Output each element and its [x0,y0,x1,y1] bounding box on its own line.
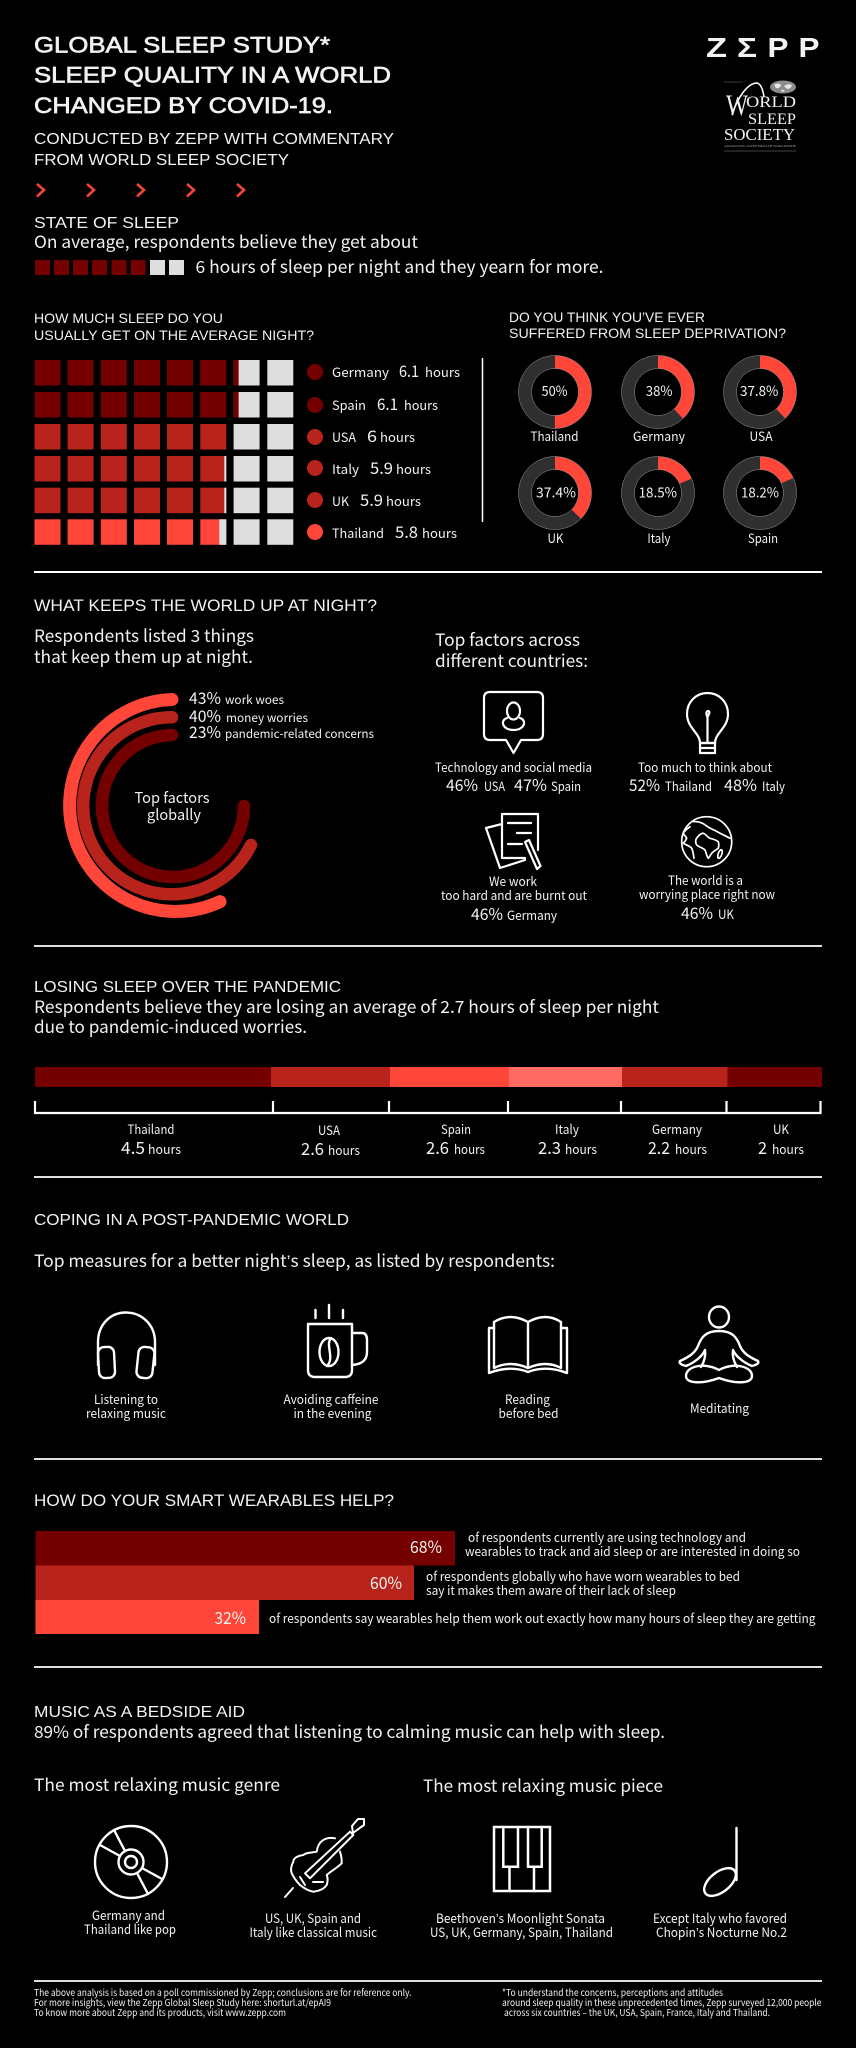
chart: wearables bars [36,1531,455,1634]
text: state of sleep intro: On average, respondents believe they get about [34,228,419,253]
heading: losing sleep: LOSING SLEEP OVER THE PANDEMIC [34,979,341,996]
text: genre and piece captions: US, UK, Spain and [265,1908,361,1927]
chart: sleep deprivation donuts [518,356,796,547]
donut: Italy 18.5% [622,456,694,547]
legend: hours by country: Thailand [332,523,384,542]
text: wearables descriptions: say it makes them aware of their lack of sleep [426,1580,676,1599]
legend: hours by country: hours [404,395,438,414]
logo: Zepp: Z [706,32,727,63]
legend: hours by country: Spain [332,395,366,414]
legend: hours by country: Italy [332,459,359,478]
legend: global factors [189,685,374,743]
heading: coping: COPING IN A POST-PANDEMIC WORLD [34,1212,349,1229]
legend: hours by country: hours [380,427,415,446]
text: measures captions [86,1389,749,1422]
chart: hours lost segmented bar [35,1067,822,1087]
title: GLOBAL SLEEP STUDY* [34,33,330,58]
footer: source notes: For more insights, view the Zepp Global Sleep Study here: shorturl.at/epAI9 [34,1995,331,2009]
legend: hours by country: 5.9 [370,455,393,479]
labels: hours lost by country: 2.6 [426,1134,449,1159]
text: technology factor: Spain [551,776,581,795]
legend: hours by country: hours [386,491,421,510]
text: measures captions: relaxing music [86,1403,167,1422]
text: top factors across countries [435,626,588,672]
text: wearables descriptions: of respondents say wearables help them work out exactly how many hours of sleep they are getting [269,1608,816,1627]
heading: music: MUSIC AS A BEDSIDE AID [34,1704,245,1721]
text: losing sleep intro: Respondents believe they are losing an average of 2.7 hours of sleep per night [34,993,660,1018]
legend: global factors: 40% [189,703,221,727]
title: CHANGED BY COVID-19. [34,93,333,118]
icon: compact disc [95,1826,167,1898]
labels: hours lost by country: hours [328,1140,360,1159]
logo: World Sleep Society: SOCIETY [724,125,795,144]
text: wearables descriptions [269,1527,816,1627]
text: genre and piece captions: Except Italy who favored [653,1908,787,1927]
subheading: piece: The most relaxing music piece [423,1772,663,1797]
footer: survey note: around sleep quality in these unprecedented times, Zepp surveyed 12,000 people [502,1995,822,2009]
icon: speech bubble with person [484,692,543,753]
heading: average night: HOW MUCH SLEEP DO YOU [34,310,223,326]
labels: hours lost by country: hours [565,1139,597,1158]
legend: global factors: work woes [225,691,284,708]
icon: violin [285,1819,364,1897]
chart: hours of sleep square grid [34,360,293,545]
logo: Zepp [706,32,820,63]
text: technology factor: 47% [514,772,547,796]
icon: meditating figure [680,1306,758,1382]
text: technology factor: USA [484,776,505,795]
text: burnt out factor [441,871,587,925]
logo: World Sleep Society: ADVANCING SLEEP HEALTH WORLDWIDE [724,144,796,148]
footer: source notes: To know more about Zepp and its products, visit www.zepp.com [34,2005,286,2019]
labels: hours lost by country: hours [772,1139,804,1158]
text: wearables descriptions: wearables to track and aid sleep or are interested in doing so [465,1541,800,1560]
donut: Thailand 50% [518,356,592,445]
text: measures captions: Avoiding caffeine [284,1389,379,1408]
text: worrying world factor: The world is a [668,870,743,889]
text: music intro: 89% of respondents agreed that listening to calming music can help with sleep. [34,1718,665,1743]
text: genre and piece captions: US, UK, Germany, Spain, Thailand [430,1922,613,1941]
labels: hours lost by country: 2.3 [538,1134,561,1159]
donut: UK 37.4%: 37.4% [536,482,576,502]
legend: hours by country: USA [332,427,356,446]
donut: USA 37.8% [724,356,796,445]
chart: wearables bars: 60% [370,1569,402,1594]
chart: wearables bars: 32% [214,1604,246,1629]
chart: radial top factors globally: globally [147,804,201,825]
labels: hours lost by country: 2 [758,1134,767,1159]
subheading: genre: The most relaxing music genre [34,1771,280,1796]
footer: survey note: *To understand the concerns, perceptions and attitudes [502,1985,723,1999]
legend: global factors: 43% [189,685,221,709]
icon: headphones [98,1312,155,1379]
subtitle: CONDUCTED BY ZEPP WITH COMMENTARY [34,131,394,148]
chart: radial top factors globally [70,700,251,911]
icon: piano keys [494,1827,550,1891]
text: genre and piece captions [84,1905,787,1941]
donut: UK 37.4% [518,456,592,547]
text: worrying world factor: worrying place right now [639,884,775,903]
donut: USA 37.8%: USA [750,426,773,445]
donut: Germany 38%: Germany [633,426,685,445]
text: six hours per night: 6 hours of sleep per night and they yearn for more. [196,253,604,278]
labels: hours lost by country: Germany [652,1119,702,1138]
donut: Italy 18.5%: 18.5% [639,482,677,502]
donut: Spain 18.2%: Spain [748,528,778,547]
labels: hours lost by country: UK [773,1119,790,1138]
labels: hours lost by country: 4.5 [121,1134,145,1159]
text: wearables descriptions: of respondents currently are using technology and [468,1527,746,1546]
labels: hours lost by country: hours [148,1139,181,1158]
icon: open book [489,1317,567,1373]
labels: hours lost by country: USA [318,1120,340,1139]
icon: globe [682,817,732,867]
icon: papers and pen [486,814,540,869]
text: measures captions: Meditating [690,1398,749,1417]
legend: hours by country: hours [422,523,457,542]
labels: hours lost by country: Italy [555,1119,579,1138]
labels: hours lost by country: 2.2 [648,1134,670,1159]
donut: Spain 18.2%: 18.2% [741,482,779,502]
subtitle: FROM WORLD SLEEP SOCIETY [34,152,289,169]
text: genre and piece captions: Germany and [92,1905,165,1924]
text: genre and piece captions: Chopin’s Nocturne No.2 [656,1922,787,1941]
legend: hours by country [307,358,460,543]
legend: hours by country: Germany [332,362,389,381]
icon: coffee mug [308,1305,367,1377]
labels: hours lost by country: Thailand [128,1119,174,1138]
text: respondents listed: Respondents listed 3 things [34,622,254,647]
chart: wearables bars: 68% [410,1533,442,1558]
heading: sleep deprivation: DO YOU THINK YOU’VE EVER [509,309,705,325]
labels: hours lost by country: Spain [441,1119,471,1138]
logo: World Sleep Society: SLEEP [748,111,796,128]
heading: average night: USUALLY GET ON THE AVERAGE NIGHT? [34,327,314,343]
text: too much to think factor: 52% [629,772,660,796]
text: measures captions: Listening to [94,1389,158,1408]
logo: Zepp: P [768,32,788,63]
text: burnt out factor: 46% [471,901,503,925]
text: technology factor: Technology and social media [435,757,592,776]
text: too much to think factor [629,757,785,796]
logo: Zepp: Σ [737,32,757,63]
text: measures captions: in the evening [294,1403,372,1422]
text: genre and piece captions: Beethoven’s Moonlight Sonata [436,1908,605,1927]
legend: hours by country: 6 [367,423,377,447]
text: burnt out factor: too hard and are burnt out [441,885,587,904]
icon: music note [699,1828,741,1901]
logo: Zepp: P [798,32,820,63]
logo: World Sleep Society: W [726,89,749,122]
legend: hours by country: UK [332,491,350,510]
donut: USA 37.8%: 37.8% [740,381,778,401]
text: losing sleep intro [34,993,660,1038]
donut: Germany 38% [622,356,694,445]
donut: Thailand 50%: Thailand [530,426,578,445]
text: top factors across countries: Top factors across [435,626,580,651]
heading: what keeps the world up: WHAT KEEPS THE WORLD UP AT NIGHT? [34,596,377,615]
text: worrying world factor: 46% [681,900,713,924]
title [34,33,391,118]
donut: Thailand 50%: 50% [542,381,568,401]
footer: survey note [502,1985,822,2019]
logo: World Sleep Society [724,80,796,151]
text: technology factor [435,757,592,796]
text: worrying world factor: UK [718,904,735,923]
donut: Italy 18.5%: Italy [647,528,671,547]
text: respondents listed: that keep them up at night. [34,643,253,668]
text: losing sleep intro: due to pandemic-induced worries. [34,1013,307,1038]
chart: radial top factors globally: Top factors [134,787,210,808]
heading: sleep deprivation: SUFFERED FROM SLEEP DEPRIVATION? [509,325,786,341]
footer: survey note: across six countries – the UK, USA, Spain, France, Italy and Thailand. [504,2005,770,2019]
labels: hours lost by country: hours [454,1139,485,1158]
heading: sleep deprivation [509,309,786,341]
subtitle [34,131,394,169]
text: burnt out factor: We work [489,871,537,890]
labels: hours lost by country: hours [675,1139,707,1158]
footer: source notes [34,1985,412,2019]
text: too much to think factor: Thailand [665,776,712,795]
footer: source notes: The above analysis is based on a poll commissioned by Zepp; conclusions are for reference only. [34,1985,412,1999]
legend: hours by country: 5.8 [395,519,418,543]
icon row: six of eight hour squares [35,260,184,275]
text: worrying world factor [639,870,775,924]
legend: hours by country: 6.1 [399,358,419,382]
logo: World Sleep Society: ORLD [746,94,796,111]
icon: light bulb [687,693,728,753]
text: genre and piece captions: Italy like classical music [250,1922,377,1941]
text: measures captions: before bed [498,1403,558,1422]
legend: global factors: money worries [226,709,308,726]
text: top measures: Top measures for a better night ’s sleep, as listed by respondents: [34,1247,555,1272]
title: SLEEP QUALITY IN A WORLD [34,63,391,88]
donut: UK 37.4%: UK [548,528,564,547]
legend: global factors: 23% [189,719,221,743]
legend: hours by country: hours [396,459,431,478]
donut: Germany 38%: 38% [646,381,673,401]
heading: average night [34,310,314,343]
text: too much to think factor: 48% [724,772,757,796]
text: burnt out factor: Germany [507,905,557,924]
legend: hours by country: hours [425,362,460,381]
text: too much to think factor: Too much to think about [638,757,772,776]
chevron arrows [37,184,244,196]
donut: Spain 18.2% [724,456,796,547]
labels: hours lost by country [121,1119,804,1160]
labels: hours lost by country: 2.6 [301,1135,324,1160]
heading: state of sleep: STATE OF SLEEP [34,215,179,232]
text: genre and piece captions: Thailand like pop [84,1919,176,1938]
bracket scale [35,1101,820,1113]
legend: global factors: pandemic-related concerns [225,725,374,742]
text: technology factor: 46% [446,772,478,796]
text: too much to think factor: Italy [762,776,785,795]
text: measures captions: Reading [505,1389,550,1408]
legend: hours by country: 5.9 [360,487,383,511]
text: top factors across countries: different countries: [435,647,588,672]
text: respondents listed [34,622,254,668]
text: wearables descriptions: of respondents globally who have worn wearables to bed [426,1566,740,1585]
heading: wearables: HOW DO YOUR SMART WEARABLES HELP? [34,1492,394,1510]
legend: hours by country: 6.1 [377,391,398,415]
